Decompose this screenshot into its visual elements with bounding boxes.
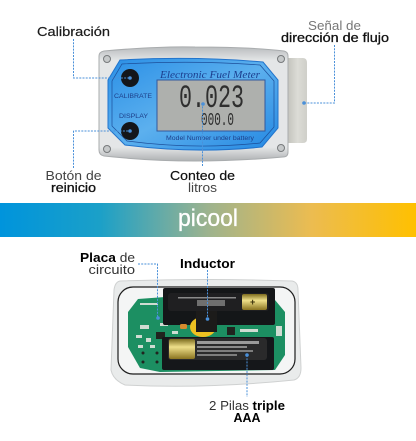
label: placa de circuito	[80, 251, 135, 277]
gasket interior	[118, 287, 295, 374]
label: calibracion: Calibración	[37, 24, 110, 39]
gasket ring	[118, 287, 295, 374]
display button	[121, 122, 139, 140]
callout dots top	[128, 76, 306, 133]
meter body	[99, 47, 288, 161]
top battery holder	[163, 288, 275, 325]
callout dots bottom	[156, 316, 249, 357]
label: pilas: AAA	[234, 411, 260, 425]
blue faceplate	[108, 58, 278, 150]
calibrate button	[121, 69, 139, 87]
meter title: Electronic Fuel Meter	[159, 70, 261, 81]
bottom battery	[168, 338, 267, 360]
label: senal de direccion: dirección de flujo	[281, 30, 389, 45]
label: boton de reinicio	[46, 169, 102, 195]
yellow coil	[190, 317, 216, 337]
label: conteo de litros: Conteo de	[170, 168, 235, 183]
bottom battery holder	[162, 337, 274, 370]
inductor block	[196, 311, 217, 332]
LCD secondary reading: 000.0	[201, 111, 234, 131]
top battery	[168, 293, 269, 311]
board components	[136, 303, 282, 348]
label: inductor: Inductor	[180, 256, 235, 271]
label: conteo de litros: litros	[188, 181, 217, 195]
brand name: picool	[178, 205, 238, 232]
label: boton de reinicio: reinicio	[51, 181, 96, 195]
brand band	[0, 203, 416, 237]
orange capacitor	[180, 324, 187, 329]
model label: Model Number under battery	[166, 135, 255, 142]
corner screws	[104, 56, 284, 152]
label: senal de direccion	[281, 19, 389, 45]
label: placa de circuito: Placa de	[80, 251, 135, 265]
display label: DISPLAY	[119, 113, 148, 120]
open housing	[111, 280, 301, 386]
pipe fitting	[286, 58, 307, 143]
clear case	[111, 280, 301, 386]
label: pilas	[209, 399, 285, 425]
callout lines bottom	[138, 264, 247, 397]
callout lines top	[74, 39, 334, 168]
flow meter device	[99, 47, 307, 161]
calibrate label: CALIBRATE	[114, 93, 152, 100]
LCD main reading: 0.023	[179, 80, 244, 117]
label: pilas: 2 Pilas triple	[209, 399, 285, 413]
circuit board	[128, 297, 285, 372]
label: boton de reinicio: Botón de	[46, 169, 102, 183]
label: senal de direccion: Señal de	[308, 19, 361, 33]
label: conteo de litros	[170, 168, 235, 195]
label: placa de circuito: circuito	[88, 263, 135, 277]
top battery: +	[250, 297, 255, 307]
LCD screen	[157, 80, 265, 131]
